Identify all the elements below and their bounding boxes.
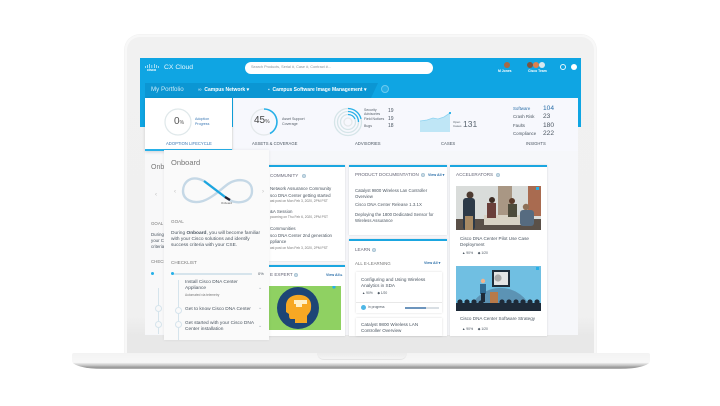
cases: Open Cases [453, 120, 462, 128]
community card: ast post on Mon Feb 3, 2020, 2PM PST [270, 199, 328, 203]
community card: Network Assurance Community [270, 186, 331, 191]
goal section: GOAL [171, 219, 184, 224]
assets and coverage: Asset Support Coverage [282, 117, 305, 126]
product documentation card [349, 165, 447, 235]
front panel: onboard: Automated via telemetry [185, 293, 219, 297]
cases: CASES [441, 141, 455, 146]
community card: ast post on Mon Feb 3, 2020, 2PM PST [270, 246, 328, 250]
trackpad notch [317, 353, 407, 360]
learn card: View All ▾ [424, 261, 440, 265]
assets and coverage: 45% [254, 115, 270, 126]
user avatars: M Jones [498, 69, 512, 73]
app header bar [140, 58, 581, 127]
front panel: onboard: Get to know Cisco DNA Center [185, 307, 251, 312]
illustration: presenter [456, 266, 541, 311]
carousel arrows: ‹ [174, 189, 176, 195]
course: wireless analytics: Configuring and Using Wireless Analytics in SDA [361, 277, 425, 288]
community card: Communities [270, 226, 296, 231]
accelerators card: ▲ 90% ◆ 1/20 [462, 327, 488, 331]
ask the expert card [263, 265, 345, 336]
content background [145, 151, 578, 335]
back panel: onboard: GOAL [151, 221, 163, 226]
progress bar [172, 273, 252, 274]
insights: 104 [543, 105, 554, 112]
cases [420, 112, 477, 146]
expand chevrons [258, 285, 262, 329]
search box: Search Products, Serial #, Case #, Contract #... [251, 65, 331, 69]
panel title: Onboard [171, 158, 200, 167]
laptop lid [125, 35, 596, 354]
course: wireless analytics [356, 272, 442, 313]
advisories [334, 108, 394, 146]
back panel: onboard [145, 155, 205, 334]
community card: &A Session [270, 209, 292, 214]
insights: 23 [543, 113, 550, 120]
front panel: onboard: Get started with your Cisco DNA Center installation [185, 321, 254, 332]
accelerator title: Cisco DNA Center Software Strategy [460, 316, 535, 321]
brand: CX Cloud [145, 64, 193, 72]
tab: My Portfolio: My Portfolio [151, 86, 184, 93]
expand chevrons: ⌄ [258, 285, 262, 291]
cases: 131 [463, 119, 477, 129]
product documentation card: View All ▾ [428, 173, 444, 177]
front panel: onboard: › [262, 189, 264, 195]
course: catalyst overview: Catalyst 9800 Wireless LAN Controller Overview [361, 322, 418, 333]
advisories: Security Advisories [364, 108, 380, 116]
learn card: LEARN [355, 247, 370, 252]
product documentation card: PRODUCT DOCUMENTATION [355, 172, 419, 177]
community card: pcoming on Thu Feb 6, 2020, 2PM PST [270, 215, 328, 219]
course: wireless analytics: ▲ 90% ◆ 1/20 [362, 291, 387, 295]
summary strip [233, 98, 578, 151]
user avatars [498, 62, 577, 73]
accelerator title: Cisco DNA Center Pilot Use Case Deployment [460, 236, 529, 247]
assets and coverage [250, 108, 305, 146]
cisco logo: cisco [147, 68, 156, 72]
tab bar [145, 83, 378, 98]
insights: Faults [513, 123, 525, 128]
photo: team meeting [456, 186, 541, 230]
accelerators card [450, 165, 547, 336]
brand: CX Cloud: CX Cloud [164, 64, 193, 71]
ask the expert card: View All ▸ [326, 273, 342, 277]
community card: COMMUNITY [270, 173, 298, 178]
expand chevrons: ⌄ [258, 305, 262, 311]
insights: Compliance [513, 131, 536, 136]
course: catalyst overview [356, 318, 442, 336]
adoption lifecycle card: 0% [174, 116, 184, 127]
adoption lifecycle card: Adoption Progress [195, 117, 209, 126]
adoption lifecycle card: ADOPTION LIFECYCLE [166, 141, 212, 146]
adoption lifecycle card [145, 98, 232, 151]
back panel: onboard: ‹ [155, 192, 157, 198]
front panel: onboard: Onboard [221, 201, 232, 205]
search box [245, 62, 433, 74]
checklist items: Install Cisco DNA Center Appliance [185, 280, 238, 291]
advisories: 19 [388, 116, 394, 122]
advisories: ADVISORIES [355, 141, 381, 146]
product documentation card: Catalyst 9800 Wireless Lan Controller Overview [355, 188, 427, 199]
tab: Campus Software Image Management: ▪ Campus Software Image Management ▾ [268, 87, 366, 93]
advisories: 18 [388, 123, 394, 129]
accelerators card: ▲ 90% ◆ 1/20 [462, 251, 488, 255]
checklist section: CHECKLIST [171, 260, 197, 265]
user avatars: Cisco Team [528, 69, 547, 73]
ask the expert card: E EXPERT [270, 272, 293, 277]
insights: 180 [543, 122, 554, 129]
learn card [349, 239, 447, 336]
back panel: onboard: Onb [151, 164, 164, 171]
insights: INSIGHTS [526, 141, 546, 146]
tab: Campus Network: ∞ Campus Network ▾ [198, 87, 249, 93]
timeline rail [178, 280, 179, 340]
community card: ppliance [270, 239, 286, 244]
advisories: Field Notices [364, 117, 384, 121]
product documentation card: Cisco DNA Center Release 1.3.1X [355, 202, 422, 207]
accelerators card: ACCELERATORS [456, 172, 493, 177]
front panel: onboard: 0% [258, 271, 264, 276]
expand chevrons: ⌄ [258, 323, 262, 329]
front panel: onboard: During Onboard, you will become familiar with your Cisco solutions and identify success criteria with your CSE. [171, 231, 260, 248]
community card [263, 165, 345, 261]
insights: Software [513, 106, 530, 111]
community card: sco DNA Center getting started [270, 193, 331, 198]
insights [513, 105, 554, 146]
expert illustration [269, 286, 341, 330]
advisories: 19 [388, 108, 394, 114]
insights: Crash Risk [513, 114, 534, 119]
learn card: ALL E-LEARNING [355, 261, 391, 266]
back panel: onboard: CHECK [151, 259, 166, 264]
add tab button [381, 85, 389, 93]
insights: 222 [543, 130, 554, 137]
advisories: Bugs [364, 124, 372, 128]
community card: sco DNA Center 2nd generation [270, 233, 332, 238]
infinity lifecycle diagram [182, 177, 254, 204]
cisco logo [145, 64, 159, 72]
back panel: onboard: During your C criteria [151, 232, 164, 249]
product documentation card: Deploying the 1800 Dedicated Sensor for Wireless Assurance [355, 212, 434, 223]
course: wireless analytics: In progress [368, 305, 384, 309]
laptop base [72, 353, 650, 369]
assets and coverage: ASSETS & COVERAGE [252, 141, 297, 146]
front panel: onboard [164, 150, 269, 340]
